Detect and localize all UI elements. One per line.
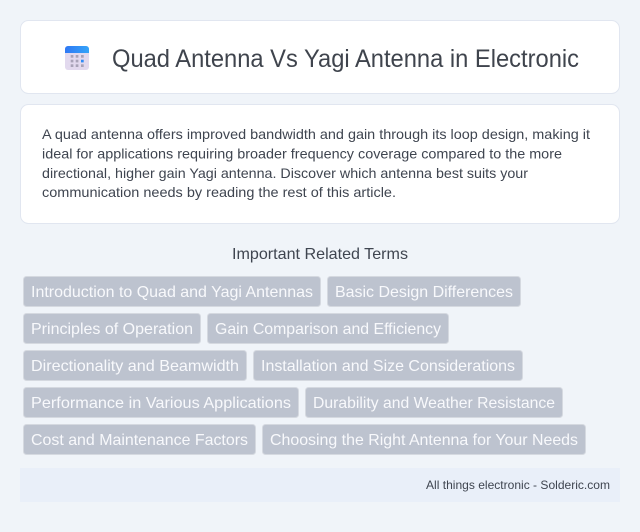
tag: choosing: Choosing the Right Antenna for Your Needs: [270, 432, 578, 449]
tag: introduction: [24, 276, 320, 306]
tag: performance: Performance in Various Applications: [31, 395, 291, 412]
tag: design differences: [328, 276, 520, 306]
tag: performance: [24, 388, 298, 418]
text block: intro paragraph: A quad antenna offers improved bandwidth and gain through its loop design, making it: [42, 126, 590, 142]
icon: calendar: [65, 46, 89, 70]
tag: choosing: [262, 424, 586, 454]
tag: design differences: Basic Design Differences: [335, 284, 513, 301]
tag: installation: [254, 350, 522, 380]
tag: introduction: Introduction to Quad and Yagi Antennas: [31, 284, 313, 301]
text block: intro paragraph: communication needs by reading the rest of this article.: [42, 184, 396, 200]
tag: principles: Principles of Operation: [31, 321, 193, 338]
tag: durability: Durability and Weather Resistance: [313, 395, 555, 412]
tag: cost: Cost and Maintenance Factors: [31, 432, 248, 449]
panel: title card: [20, 20, 620, 94]
tag group: related terms: [24, 276, 586, 454]
tag: durability: [306, 388, 562, 418]
text block: intro paragraph: ideal for applications requiring broader frequency coverage compared to the more: [42, 146, 562, 162]
tag: cost: [24, 424, 256, 454]
footer text: All things electronic - Solderic.com: [426, 478, 610, 492]
tag: principles: [24, 314, 200, 344]
heading: important related terms: Important Related Terms: [232, 246, 408, 263]
text block: intro paragraph: [42, 126, 590, 200]
tag: gain: Gain Comparison and Efficiency: [215, 321, 441, 338]
tag: installation: Installation and Size Considerations: [261, 358, 515, 375]
footer bar: [20, 468, 620, 502]
tag: directionality: Directionality and Beamwidth: [31, 358, 239, 375]
tag: directionality: [24, 350, 246, 380]
panel: intro text: [20, 104, 620, 224]
title: Quad Antenna Vs Yagi Antenna in Electronic: [112, 45, 579, 73]
text block: intro paragraph: directional, higher gain Yagi antenna. Discover which antenna best suits your: [42, 165, 528, 181]
tag: gain: [208, 314, 448, 344]
